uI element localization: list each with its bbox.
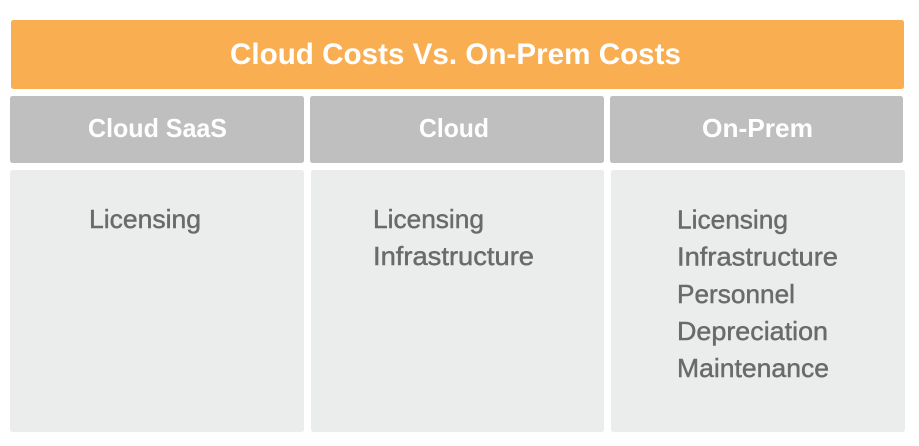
title banner bbox=[11, 20, 904, 89]
panel: On-Prem costs: Personnel bbox=[677, 279, 795, 309]
panel: On-Prem costs: Maintenance bbox=[677, 353, 829, 383]
column header: Cloud SaaS: Cloud SaaS bbox=[88, 113, 227, 143]
column header: On-Prem: On-Prem bbox=[702, 113, 813, 143]
panel: On-Prem costs: Infrastructure bbox=[677, 242, 838, 272]
panel: Cloud costs: Infrastructure bbox=[373, 241, 534, 271]
column header: On-Prem bbox=[610, 96, 903, 163]
column header: Cloud SaaS bbox=[10, 96, 304, 163]
panel: On-Prem costs: Depreciation bbox=[677, 316, 828, 346]
column header: Cloud: Cloud bbox=[419, 113, 489, 143]
panel: Cloud SaaS costs bbox=[10, 170, 304, 432]
panel: Cloud costs bbox=[311, 170, 604, 432]
panel: Cloud costs: Licensing bbox=[373, 204, 484, 234]
column header: Cloud bbox=[310, 96, 604, 163]
panel: On-Prem costs: Licensing bbox=[677, 204, 788, 234]
panel: On-Prem costs bbox=[611, 170, 905, 432]
panel: Cloud SaaS costs: Licensing bbox=[89, 204, 201, 234]
title text: Cloud Costs Vs. On-Prem Costs bbox=[230, 38, 681, 71]
